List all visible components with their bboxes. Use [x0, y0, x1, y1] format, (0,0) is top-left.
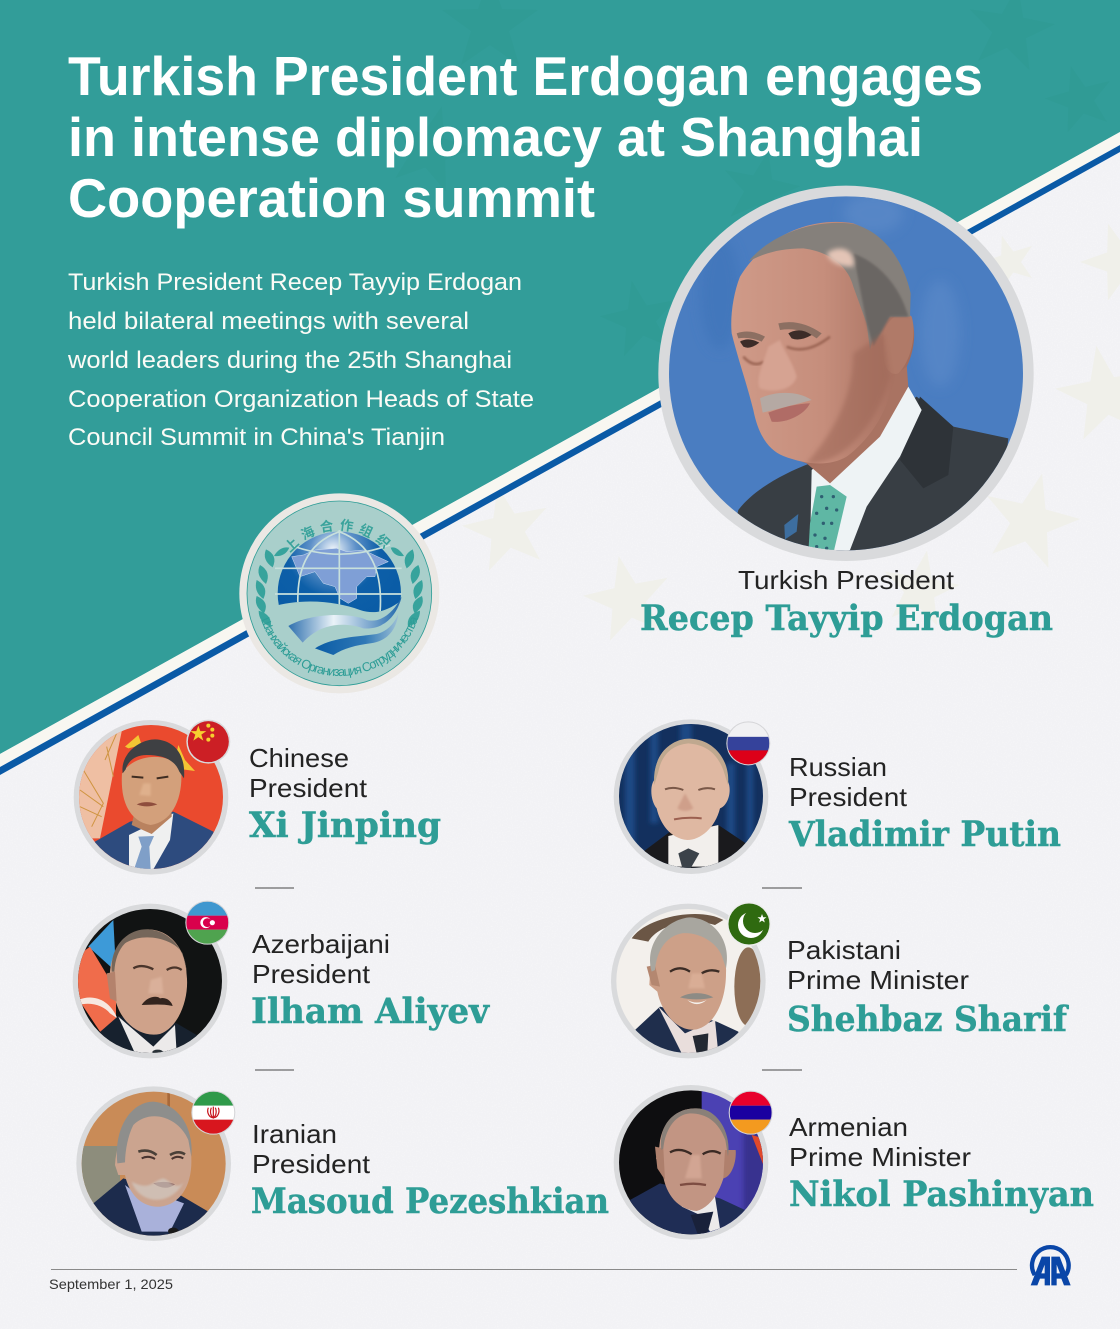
caption: Nikol Pashinyan: Prime Minister	[789, 1142, 971, 1172]
portrait: Erdogan	[657, 183, 1037, 570]
date: September 1, 2025	[49, 1276, 173, 1292]
title: Cooperation summit	[68, 167, 595, 229]
Chinese arc text: 上海合作组织	[286, 518, 391, 553]
map of member states	[292, 548, 388, 603]
caption: Ilham Aliyev: President	[252, 959, 371, 989]
globe	[275, 530, 402, 612]
blue diagonal stripe	[0, 145, 1120, 775]
flag: Pakistan	[727, 902, 771, 946]
caption: Ilham Aliyev: Azerbaijani	[252, 929, 390, 959]
caption: Nikol Pashinyan: Armenian	[789, 1112, 908, 1142]
faint stars on paper	[455, 224, 1120, 644]
flag: Armenia	[729, 1091, 773, 1135]
moustache	[760, 393, 812, 413]
portrait: Ilham Aliyev	[73, 901, 229, 1058]
nose	[758, 340, 797, 391]
caption: Shehbaz Sharif	[787, 935, 1069, 1040]
hair	[748, 223, 911, 350]
caption: Vladimir Putin: Russian	[789, 752, 887, 782]
intro text block	[67, 269, 534, 451]
neck	[800, 366, 908, 484]
pin	[784, 514, 798, 539]
title	[68, 45, 983, 229]
brows and eyes	[737, 331, 765, 342]
faint stars on teal band	[379, 0, 1120, 359]
intro text block: Council Summit in China's Tianjin	[68, 424, 445, 451]
title: Turkish President Erdogan engages	[68, 45, 983, 107]
Russian arc text: Шанхайская Организация Сотрудничества	[261, 617, 418, 678]
laurel leaves	[256, 547, 423, 627]
caption: Vladimir Putin: President	[789, 782, 908, 812]
caption: Masoud Pezeshkian	[251, 1119, 609, 1222]
caption: Shehbaz Sharif: Shehbaz Sharif	[787, 999, 1069, 1040]
portrait: Shehbaz Sharif	[611, 902, 771, 1058]
caption: Ilham Aliyev: Ilham Aliyev	[251, 991, 491, 1032]
caption: Shehbaz Sharif: Pakistani	[787, 935, 901, 965]
cream stripe under the band	[0, 132, 1120, 767]
flag: Russia	[726, 721, 770, 765]
caption: Nikol Pashinyan	[789, 1112, 1094, 1215]
caption: Erdogan: Turkish President	[738, 565, 955, 595]
intro text block: Turkish President Recep Tayyip Erdogan	[68, 269, 522, 296]
title: in intense diplomacy at Shanghai	[68, 106, 923, 168]
flag: Azerbaijan	[185, 901, 229, 945]
caption: Shehbaz Sharif: Prime Minister	[787, 965, 969, 995]
portrait: Masoud Pezeshkian	[76, 1086, 235, 1241]
logo: Anadolu Agency	[1031, 1247, 1071, 1285]
tie	[808, 485, 847, 553]
waves	[288, 597, 402, 643]
portrait: Xi Jinping	[74, 720, 230, 875]
caption: Masoud Pezeshkian: Iranian	[252, 1119, 337, 1149]
caption: Xi Jinping: Xi Jinping	[249, 805, 441, 846]
caption: Erdogan	[640, 565, 1053, 639]
intro text block: held bilateral meetings with several	[68, 308, 469, 335]
caption: Masoud Pezeshkian: Masoud Pezeshkian	[251, 1181, 609, 1222]
caption: Nikol Pashinyan: Nikol Pashinyan	[789, 1174, 1094, 1215]
caption: Xi Jinping: Chinese	[249, 743, 349, 773]
teal diagonal header band	[0, 0, 1120, 754]
intro text block: Cooperation Organization Heads of State	[68, 386, 534, 413]
ear	[894, 315, 914, 374]
grid lines	[275, 530, 402, 613]
portrait: Vladimir Putin	[614, 719, 770, 874]
caption: Vladimir Putin: Vladimir Putin	[788, 814, 1061, 855]
emblem: Shanghai Cooperation Organisation	[239, 493, 440, 694]
suit	[738, 396, 1008, 550]
intro text block: world leaders during the 25th Shanghai	[67, 347, 512, 374]
flag: China	[186, 720, 230, 764]
caption: Xi Jinping	[249, 743, 441, 846]
lower face shading	[807, 333, 890, 464]
caption: Ilham Aliyev	[251, 929, 491, 1032]
caption: Masoud Pezeshkian: President	[252, 1149, 371, 1179]
portrait: Nikol Pashinyan	[614, 1085, 773, 1240]
caption: Xi Jinping: President	[249, 773, 368, 803]
flag: Iran	[191, 1091, 235, 1135]
face	[731, 222, 914, 463]
caption: Vladimir Putin	[788, 752, 1061, 855]
shirt	[810, 387, 922, 560]
eye bags	[743, 357, 764, 364]
lips	[768, 403, 810, 422]
caption: Erdogan: Recep Tayyip Erdogan	[640, 598, 1053, 639]
